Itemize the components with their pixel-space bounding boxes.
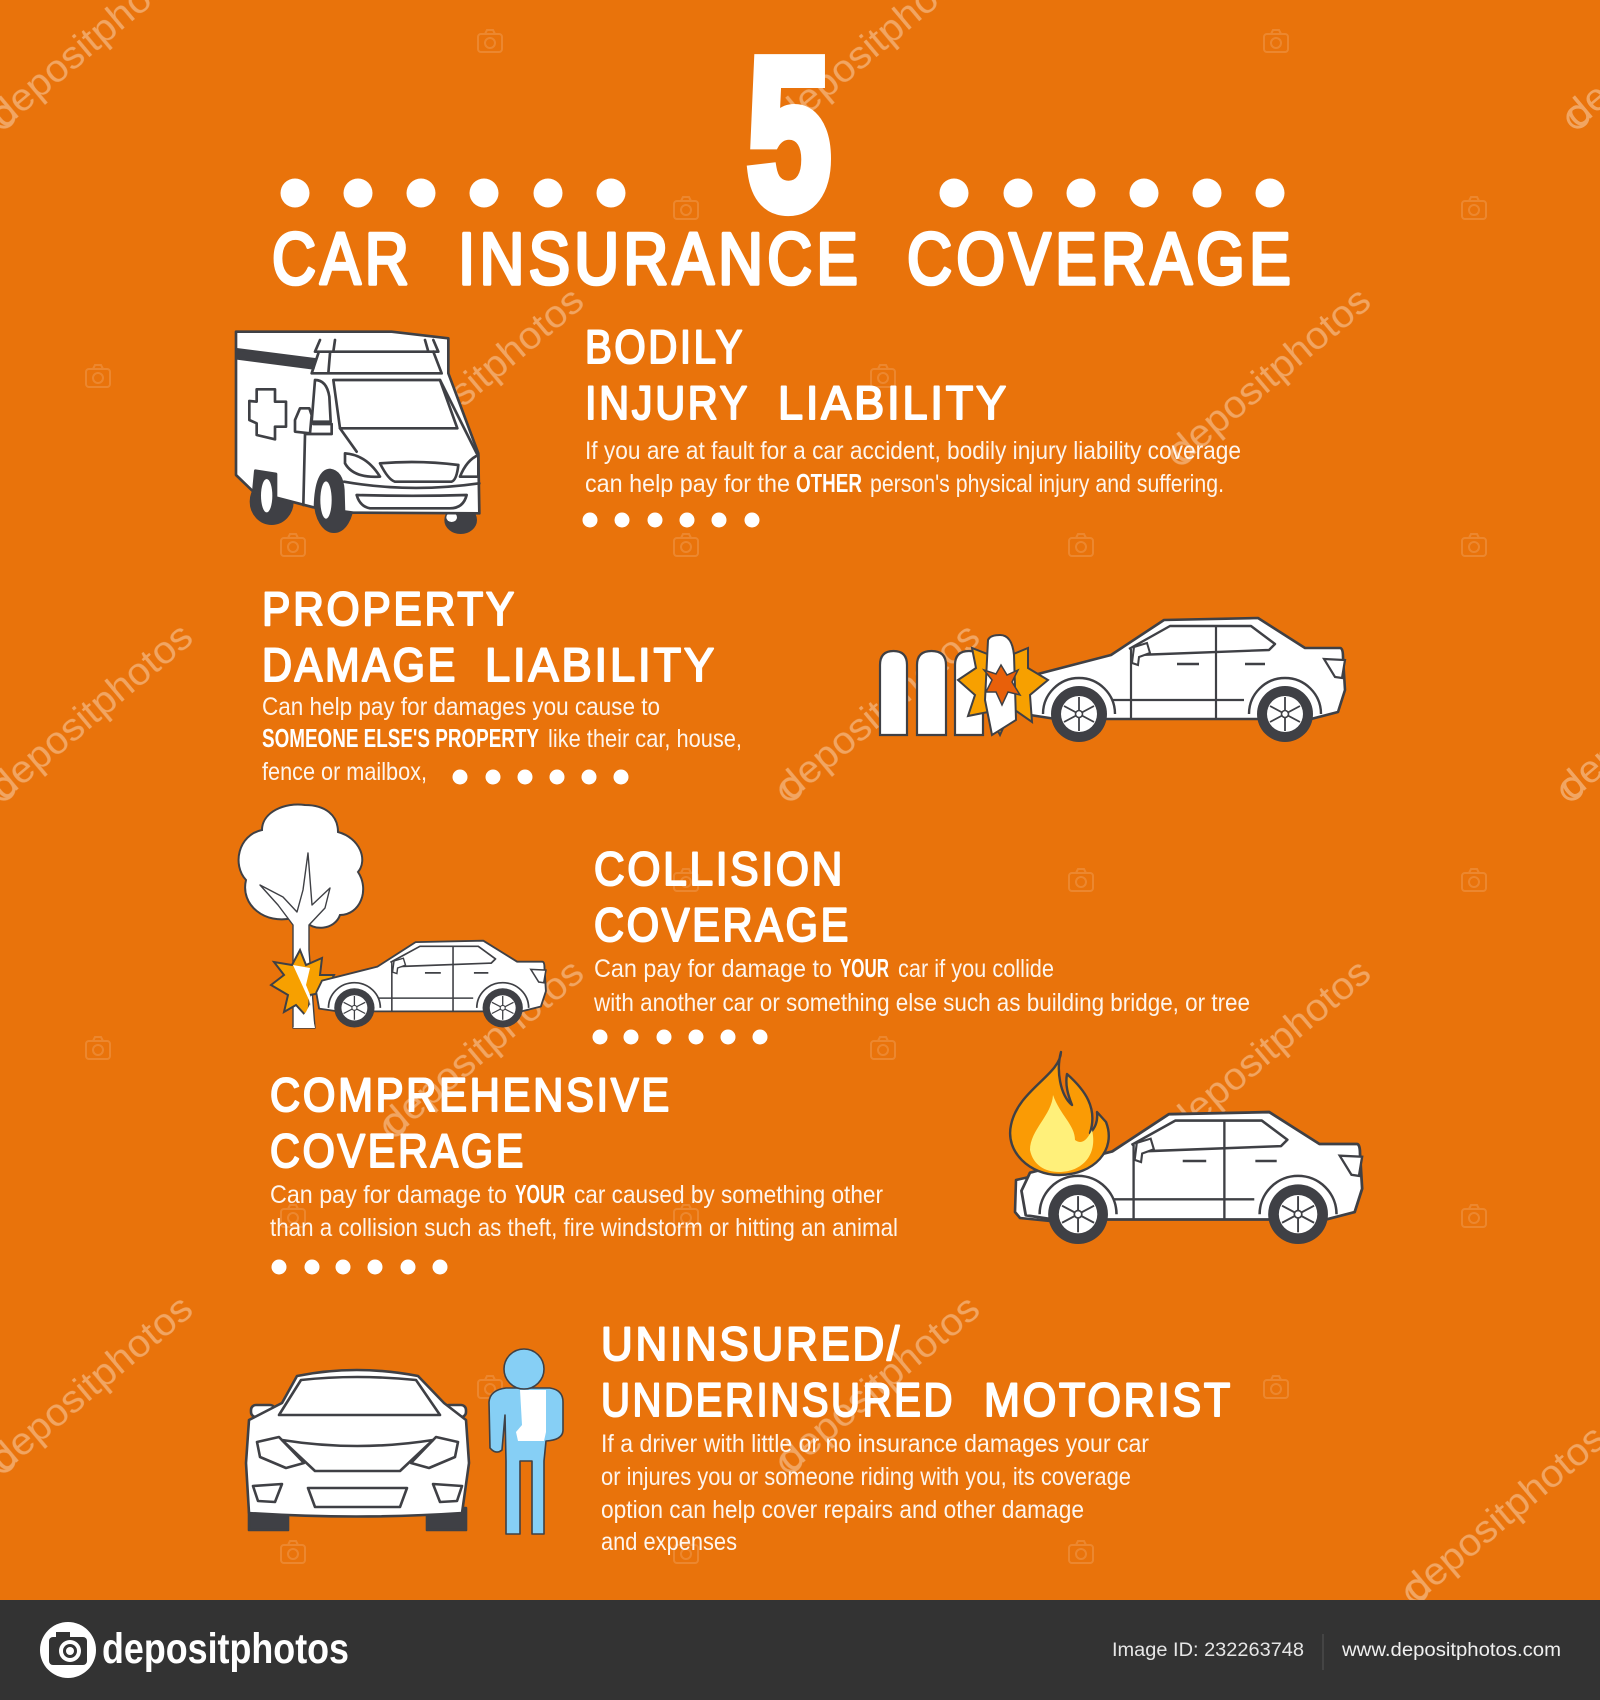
text: collision description bbox=[593, 953, 1250, 1017]
image id: Image ID: 232263748 bbox=[1112, 1640, 1304, 1661]
watermark pattern: depositphotos bbox=[769, 1287, 988, 1480]
heading: uninsured motorist: MOTORIST bbox=[984, 1373, 1233, 1426]
text: collision description: Can pay for damage to bbox=[594, 955, 832, 983]
watermark pattern: depositphotos bbox=[373, 279, 592, 472]
text: uninsured description: If a driver with little or no insurance damages your car bbox=[601, 1430, 1149, 1458]
text: bodily injury description bbox=[585, 437, 1241, 498]
heading: property damage liability: DAMAGE bbox=[262, 638, 458, 691]
text: uninsured description: or injures you or someone riding with you, its coverage bbox=[601, 1463, 1131, 1491]
watermark pattern: depositphotos bbox=[1160, 951, 1379, 1144]
heading: property damage liability bbox=[262, 582, 717, 691]
heading: bodily injury liability: BODILY bbox=[585, 320, 745, 373]
title: CAR bbox=[272, 219, 413, 300]
footer bar bbox=[0, 1600, 1600, 1700]
heading: collision coverage: COVERAGE bbox=[594, 898, 851, 951]
heading: uninsured motorist bbox=[601, 1317, 1233, 1426]
watermark pattern: depositphotos bbox=[769, 615, 988, 808]
watermark pattern: depositphotos bbox=[1160, 279, 1379, 472]
dots bbox=[272, 1260, 448, 1274]
heading: comprehensive coverage: COMPREHENSIVE bbox=[270, 1068, 672, 1121]
heading: comprehensive coverage bbox=[270, 1068, 672, 1177]
heading: collision coverage: COLLISION bbox=[594, 842, 845, 895]
panel: property damage liability bbox=[262, 582, 1345, 786]
watermark pattern: depositphotos bbox=[1395, 1417, 1600, 1610]
text: comprehensive description: car caused by something other bbox=[574, 1181, 883, 1209]
title: COVERAGE bbox=[907, 219, 1295, 300]
heading: property damage liability: LIABILITY bbox=[485, 638, 717, 691]
panel: bodily injury liability bbox=[236, 320, 1241, 533]
header dots left bbox=[280, 178, 626, 208]
heading: uninsured motorist: UNDERINSURED bbox=[601, 1373, 955, 1426]
text: collision description: with another car or something else such as building bridge, or tree bbox=[593, 989, 1250, 1017]
text: comprehensive description: than a collision such as theft, fire windstorm or hitting an animal bbox=[270, 1214, 898, 1242]
dots bbox=[452, 770, 628, 784]
heading: bodily injury liability bbox=[585, 320, 1009, 429]
text: property damage description: SOMEONE ELSE'S PROPERTY bbox=[262, 723, 539, 753]
icon: car on fire bbox=[1010, 1052, 1362, 1244]
title: INSURANCE bbox=[458, 219, 862, 300]
title bbox=[272, 219, 1295, 300]
big number 5: 5 bbox=[747, 13, 831, 254]
heading: bodily injury liability: INJURY bbox=[585, 376, 750, 429]
text: bodily injury description: can help pay for the bbox=[585, 470, 790, 498]
icon: depositphotos logo bbox=[40, 1622, 96, 1678]
website url: www.depositphotos.com bbox=[1341, 1640, 1561, 1661]
text: property damage description: Can help pay for damages you cause to bbox=[262, 693, 660, 721]
panel: collision coverage bbox=[239, 804, 1250, 1044]
heading: collision coverage bbox=[594, 842, 851, 951]
text: property damage description: fence or mailbox, bbox=[262, 758, 427, 786]
footer brand name: depositphotos bbox=[102, 1625, 349, 1673]
watermark pattern: depositphotos bbox=[373, 951, 592, 1144]
text: uninsured description: option can help cover repairs and other damage bbox=[601, 1496, 1084, 1524]
text: bodily injury description: If you are at fault for a car accident, bodily injury liability coverage bbox=[585, 437, 1241, 465]
small watermark camera icons bbox=[86, 30, 1486, 1563]
text: collision description: YOUR bbox=[840, 953, 889, 983]
text: property damage description: like their car, house, bbox=[548, 725, 742, 753]
text: property damage description bbox=[262, 693, 742, 786]
heading: property damage liability: PROPERTY bbox=[262, 582, 517, 635]
text: uninsured description: and expenses bbox=[601, 1528, 737, 1556]
dots bbox=[582, 512, 760, 528]
heading: bodily injury liability: LIABILITY bbox=[778, 376, 1009, 429]
icon: ambulance bbox=[236, 332, 479, 533]
dots bbox=[592, 1030, 768, 1044]
text: comprehensive description bbox=[270, 1179, 898, 1242]
heading: comprehensive coverage: COVERAGE bbox=[270, 1124, 526, 1177]
icon: car hitting tree bbox=[239, 804, 546, 1028]
heading: uninsured motorist: UNINSURED/ bbox=[601, 1317, 902, 1370]
text: collision description: car if you collide bbox=[898, 955, 1054, 983]
text: bodily injury description: person's physical injury and suffering. bbox=[870, 470, 1224, 498]
text: comprehensive description: Can pay for damage to bbox=[270, 1181, 507, 1209]
icon: car hitting fence bbox=[880, 618, 1345, 742]
header dots right bbox=[940, 178, 1284, 208]
icon: injured person bbox=[489, 1349, 563, 1534]
text: comprehensive description: YOUR bbox=[515, 1179, 565, 1209]
icon: car front bbox=[246, 1370, 469, 1530]
panel: comprehensive coverage bbox=[270, 1052, 1362, 1274]
text: uninsured description bbox=[601, 1430, 1149, 1556]
panel: uninsured motorist bbox=[246, 1317, 1233, 1556]
text: bodily injury description: OTHER bbox=[796, 468, 862, 498]
